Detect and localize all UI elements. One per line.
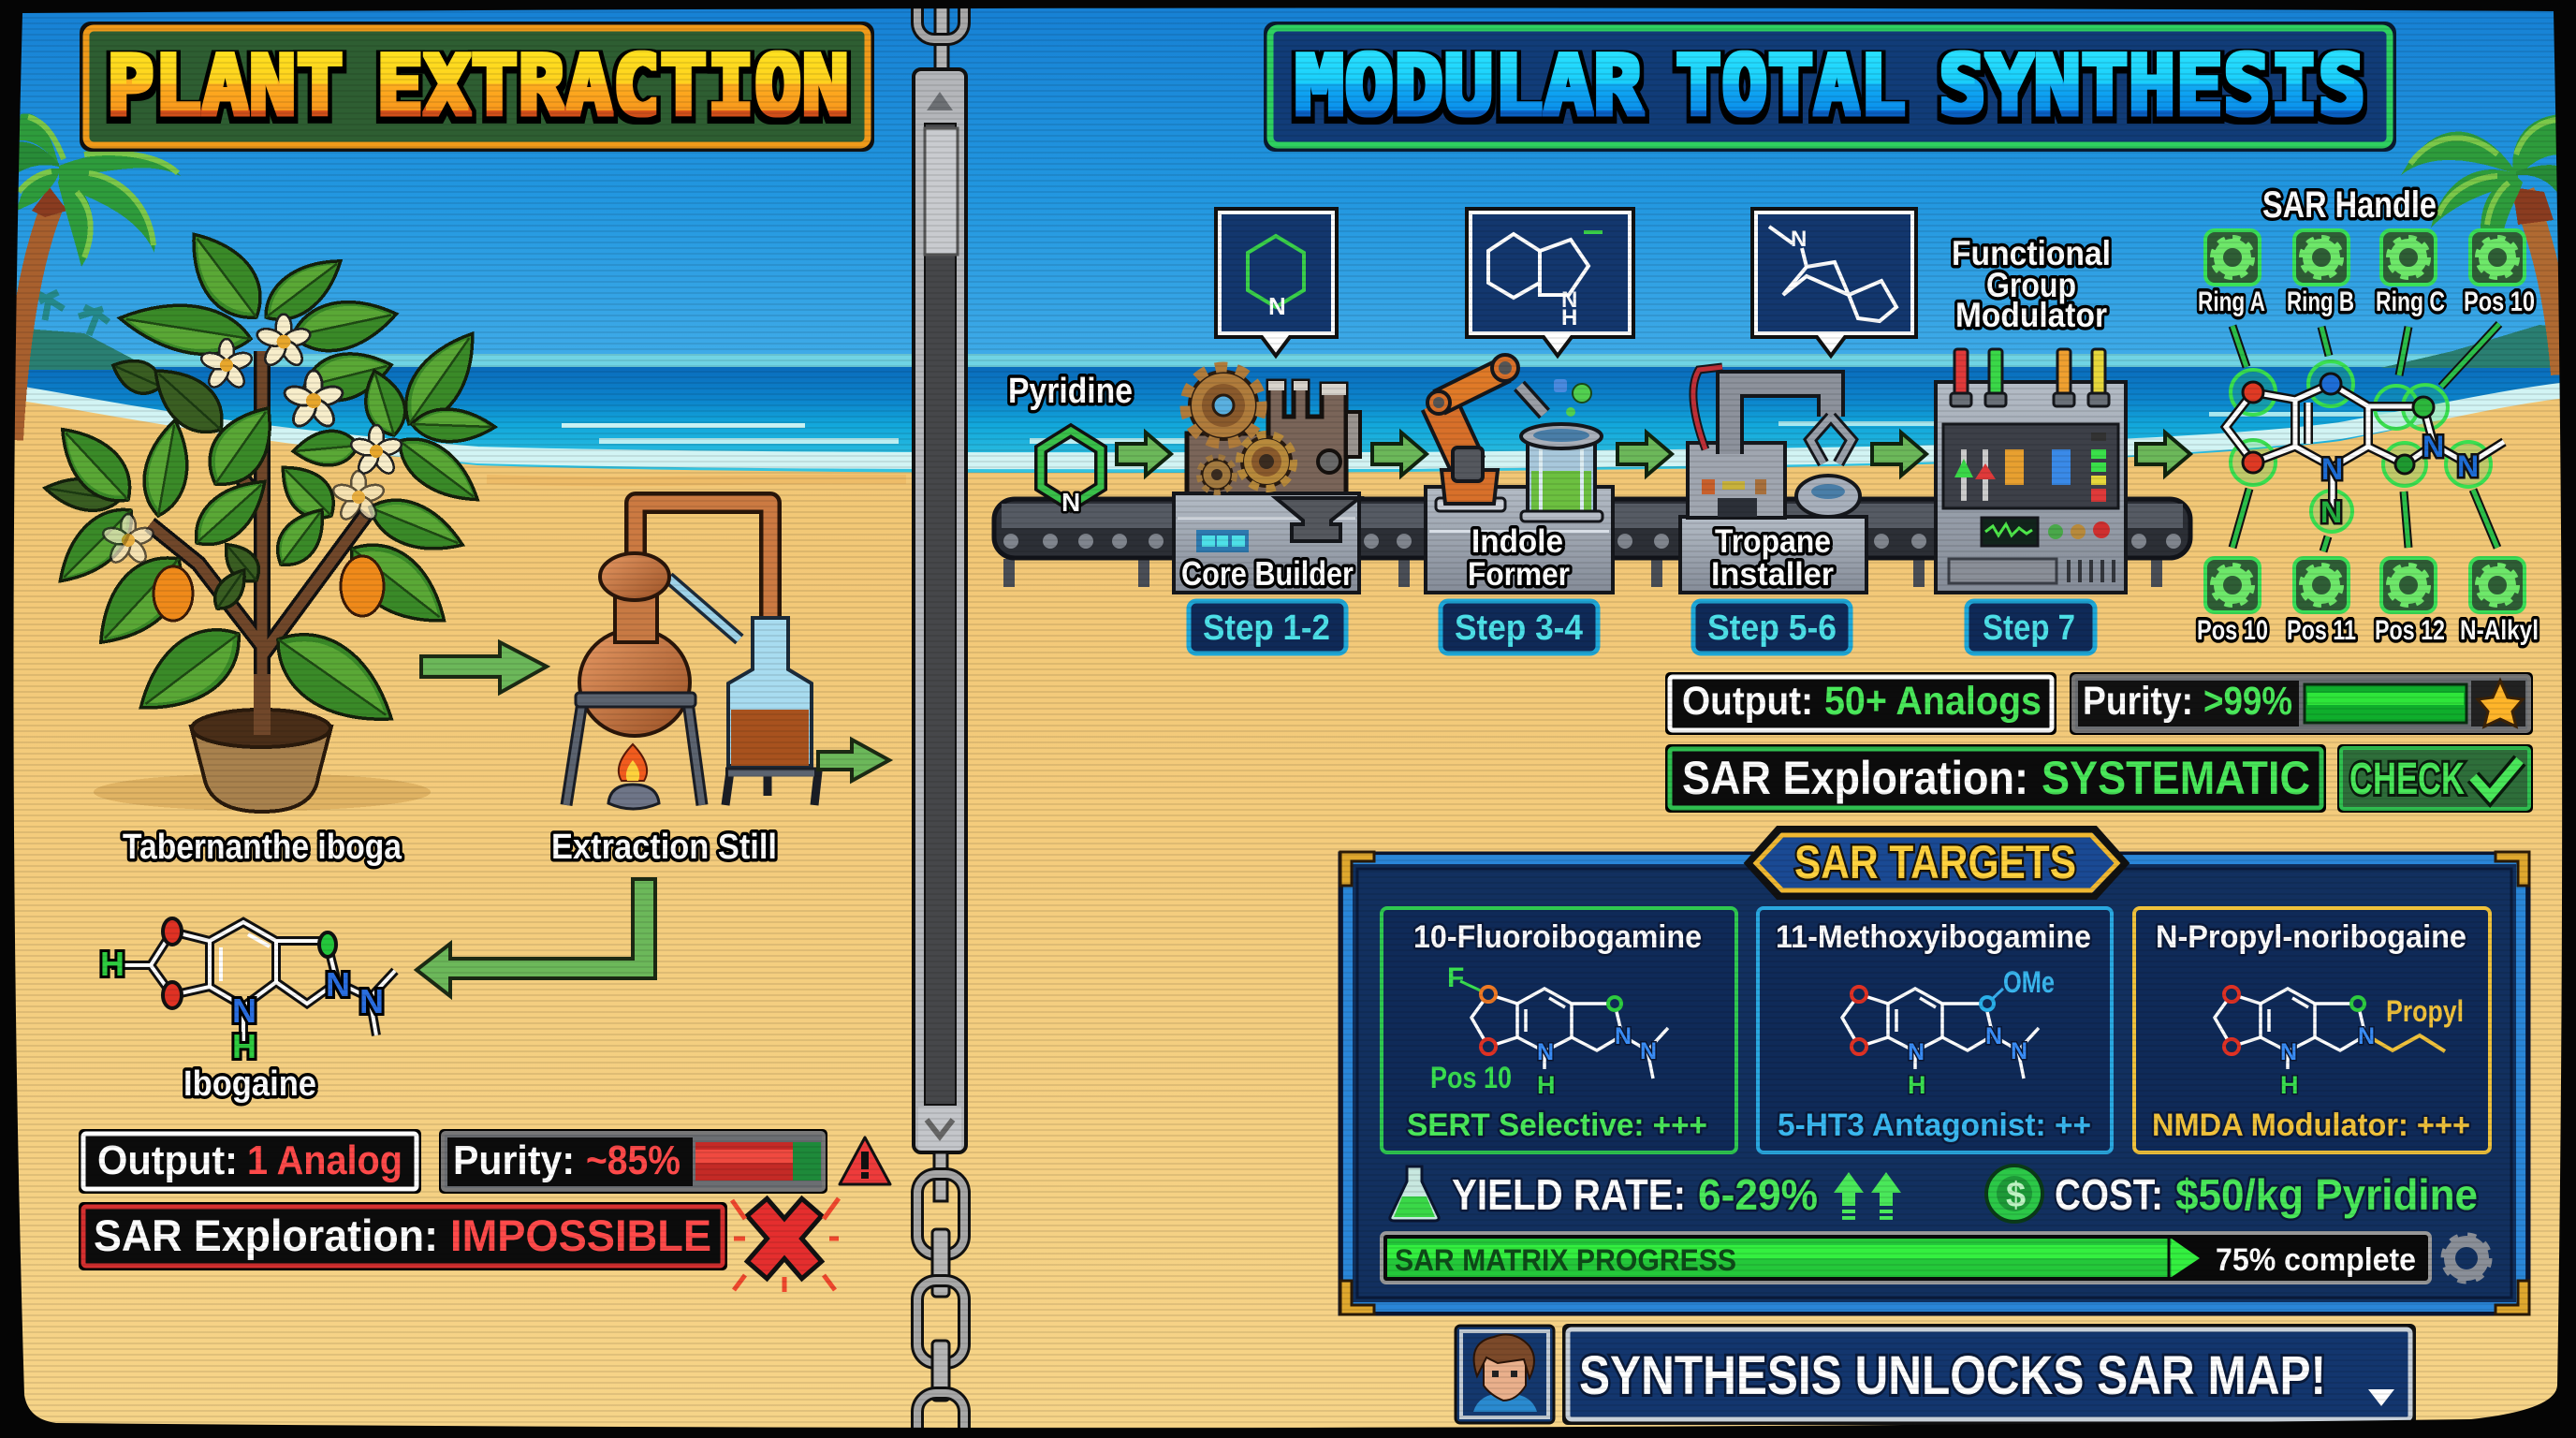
card: 10-fluoroibogamine: SERT Selective: +++ [1407,1108,1707,1143]
molecule: ibogaine: N [326,965,350,1004]
stat: yield rate [1452,1170,1901,1219]
panel corners [1340,852,2529,1314]
step badges: Step 5-6 [1707,609,1837,648]
header: SAR targets: SAR TARGETS [1794,836,2076,888]
molecule: N [2358,1023,2375,1049]
SAR handle map: N [2320,495,2342,529]
status: purity 99 percent [2070,672,2533,735]
molecule: N [2280,1039,2297,1065]
machine: indole former [1426,355,1613,593]
bubble: indole structure [1467,209,1633,356]
status: SAR exploration impossible: IMPOSSIBLE [450,1211,711,1260]
icon: dollar coin: $ [2006,1176,2026,1215]
SAR matrix progress bar [1382,1233,2430,1283]
bubble: tropane structure [1752,209,1916,356]
status: SAR exploration systematic [1665,744,2326,813]
icon: warning triangle [840,1137,890,1184]
icon: extraction still [566,503,889,809]
status: SAR exploration systematic: SYSTEMATIC [2042,752,2310,804]
title: modular total synthesis [1264,22,2396,152]
arrow: plant to still [421,642,547,693]
SAR handle map: Pos 10 [2464,286,2535,317]
bubble: pyridine structure: N [1268,292,1286,320]
molecule: ibogaine: H [100,945,124,983]
status: purity 99 percent: >99% [2203,679,2292,724]
conveyor belt [994,499,2190,587]
icon: gold star [2478,681,2523,726]
status: output 50+ analogs [1665,672,2056,735]
molecule: OMe [2003,965,2055,999]
molecule: H [1537,1071,1556,1099]
stat: cost [2055,1170,2478,1219]
molecule: ibogaine [100,918,395,1065]
molecule [1842,965,2055,1099]
icon: pyridine ring: N [1061,488,1080,517]
label: pyridine: Pyridine [1008,372,1133,411]
title: modular total synthesis: MODULAR [1295,37,1643,134]
step badges: Step 1-2 [1203,609,1330,648]
label: functional group modulator: Modulator [1955,296,2107,334]
machine: indole former: Indole [1471,523,1563,560]
molecule [1430,962,1668,1099]
card: N-propyl-noribogaine: N-Propyl-noribogaine [2156,919,2466,955]
machine: tropane installer [1680,367,1866,593]
SAR matrix progress bar: SAR MATRIX PROGRESS [1395,1243,1736,1277]
molecule: F [1447,962,1464,993]
icon: settings gear [2444,1236,2489,1281]
step badges: Step 7 [1983,609,2075,648]
card: 10-fluoroibogamine [1382,908,1736,1152]
SAR handle map: Pos 11 [2287,615,2356,646]
right palm tree and island [2380,114,2569,374]
molecule: N [1640,1038,1657,1064]
SAR handle map: SAR Handle [2262,184,2437,226]
stat: cost: COST: [2055,1170,2163,1219]
machine: indole former: Former [1468,556,1570,593]
icon: pyridine ring [1041,431,1101,517]
arrow: still to ibogaine [417,879,655,996]
status: SAR exploration impossible: SAR Exploration: [94,1211,438,1260]
status: SAR exploration systematic: SAR Exploration: [1682,752,2028,804]
stat: yield rate: YIELD RATE: [1452,1170,1686,1219]
SAR handle map: N [2457,449,2479,483]
stat: cost: $50/kg Pyridine [2175,1170,2478,1219]
SAR handle map [2197,184,2539,646]
panel: SAR targets [1340,829,2529,1314]
molecule: N [1615,1023,1632,1049]
central scrollbar with chains [914,0,966,1438]
SAR handle map: N [2321,452,2343,486]
dialog box: synthesis unlocks SAR map [1562,1324,2416,1425]
bubble: indole structure: N [1561,287,1577,313]
header: SAR targets [1749,829,2125,896]
title: plant extraction: PLANT [107,37,344,134]
title: plant extraction [80,22,874,152]
label: ibogaine: Ibogaine [183,1064,316,1104]
molecule: N [1985,1023,2002,1049]
arrows between machines [1117,433,2190,476]
card: 11-methoxyibogamine: 5-HT3 Antagonist: ++ [1778,1108,2091,1143]
step badges: Step 3-4 [1455,609,1583,648]
molecule: Pos 10 [1430,1061,1512,1094]
status: output 1 analog: 1 Analog [247,1137,402,1183]
icon: red X with sparks [732,1198,839,1292]
machine: tropane installer: Installer [1711,556,1834,593]
molecule: ibogaine: N [359,982,384,1020]
molecule [2215,987,2464,1099]
dialog box: synthesis unlocks SAR map: SYNTHESIS UNLOCKS SAR MAP! [1579,1345,2326,1406]
card: N-propyl-noribogaine: NMDA Modulator: +++ [2152,1108,2470,1143]
label: functional group modulator: Functional [1952,234,2111,272]
status: output 1 analog: Output: [97,1137,238,1183]
badge: check [2337,744,2533,813]
machine: functional group modulator [1936,349,2126,593]
icon: dollar coin [1986,1166,2042,1222]
molecule: N [1537,1039,1554,1065]
status: output 1 analog [79,1129,421,1194]
status: SAR exploration impossible [79,1202,727,1270]
icon: green flask [1390,1167,1439,1221]
SAR handle map: Ring A [2198,286,2265,317]
molecule: N [1908,1039,1925,1065]
machine: tropane installer: Tropane [1715,523,1831,560]
card: 10-fluoroibogamine: 10-Fluoroibogamine [1413,919,1702,955]
SAR handle map: Pos 12 [2375,615,2445,646]
SAR handle map: N [2422,430,2444,463]
status: purity 85 percent: Purity: [453,1137,575,1183]
status: output 50+ analogs: 50+ Analogs [1824,679,2042,724]
badge: check: CHECK [2349,755,2465,804]
label: extraction still: Extraction Still [551,828,777,867]
bubble: tropane structure: N [1791,227,1807,252]
SAR handle map: Ring B [2287,286,2354,317]
molecule: N [2011,1038,2027,1064]
molecule: ibogaine: N [232,991,256,1030]
status: purity 85 percent: ~85% [586,1137,681,1183]
molecule: H [1908,1071,1926,1099]
bubble: indole structure: H [1561,305,1577,330]
character portrait [1456,1326,1554,1423]
title: modular total synthesis: TOTAL [1676,37,1906,134]
status: purity 85 percent [439,1129,827,1194]
label: functional group modulator: Group [1986,266,2076,304]
label: tabernanthe iboga: Tabernanthe iboga [123,828,402,867]
stat: yield rate: 6-29% [1698,1170,1818,1219]
machine: core builder: Core Builder [1181,554,1354,593]
status: purity 99 percent: Purity: [2083,679,2193,724]
molecule: ibogaine: H [232,1027,256,1065]
icon: tabernanthe iboga plant [42,219,496,812]
SAR handle map: N-Alkyl [2460,615,2539,646]
card: N-propyl-noribogaine [2134,908,2490,1152]
molecule: Propyl [2386,994,2464,1028]
bubble: pyridine structure [1216,209,1337,356]
step badges [1189,601,2095,653]
left palm tree and island [12,113,181,440]
title: plant extraction: EXTRACTION [376,37,849,134]
SAR matrix progress bar: 75% complete [2216,1242,2416,1278]
SAR handle map: Pos 10 [2197,615,2268,646]
label: functional group modulator [1952,234,2111,334]
status: output 50+ analogs: Output: [1682,679,1813,724]
molecule: H [2280,1071,2299,1099]
title: modular total synthesis: SYNTHESIS [1939,37,2365,134]
card: 11-methoxyibogamine: 11-Methoxyibogamine [1776,919,2091,955]
machine: core builder [1174,367,1360,593]
card: 11-methoxyibogamine [1758,908,2112,1152]
SAR handle map: Ring C [2376,286,2445,317]
